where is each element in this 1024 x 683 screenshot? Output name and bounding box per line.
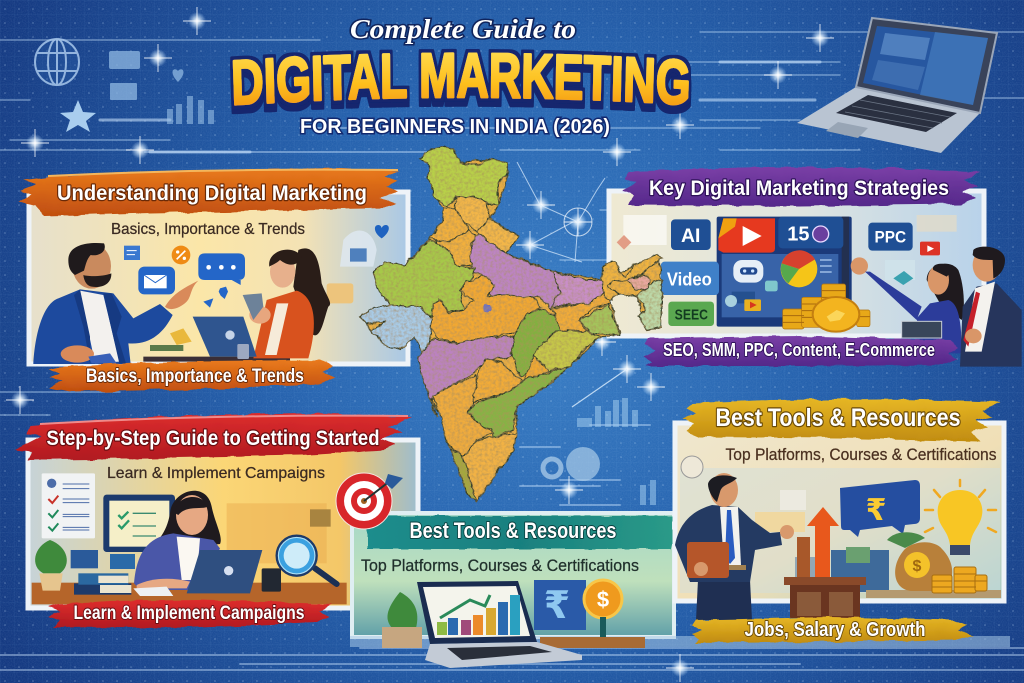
subheading: Learn & Implement Campaigns <box>107 465 325 482</box>
top banner: Understanding Digital Marketing <box>57 182 367 205</box>
icon: target with arrow <box>336 473 403 529</box>
books <box>74 573 131 595</box>
plant in crate <box>382 592 422 648</box>
coins <box>932 567 987 593</box>
bottom banner: SEO, SMM, PPC, Content, E-Commerce <box>663 340 935 360</box>
panel frame <box>675 423 1004 601</box>
panel: best tools and resources (teal) <box>350 513 1010 668</box>
plant <box>35 540 67 591</box>
monitor <box>71 495 175 569</box>
badge: PPC <box>868 223 913 251</box>
tablet <box>717 217 852 327</box>
woman <box>134 491 221 590</box>
badge: SEEC: SEEC <box>675 306 708 323</box>
top banner: Step-by-Step Guide to Getting Started <box>46 427 380 450</box>
bottom banner: Learn & Implement Campaigns <box>74 603 304 624</box>
icon: growth arrow <box>797 507 839 577</box>
illustration: woman at desk <box>32 473 347 604</box>
icon: money bag: $ <box>913 558 922 575</box>
icon: globe <box>35 39 79 85</box>
icon: rupee card <box>534 580 586 630</box>
icon: rupee speech bubble <box>840 480 920 537</box>
icon: heart <box>375 225 389 238</box>
bottom banner <box>48 600 332 628</box>
heading band <box>367 516 672 549</box>
icon: light bulb <box>925 480 996 555</box>
wooden desk <box>540 637 645 648</box>
sparkles <box>6 7 834 682</box>
bottom banner: Jobs, Salary & Growth <box>744 619 926 641</box>
panel frame <box>28 440 418 608</box>
icon: play tile <box>920 242 940 255</box>
badge: PPC: PPC <box>874 228 906 247</box>
heading band: Best Tools & Resources <box>410 518 616 543</box>
icon: robot <box>725 260 778 311</box>
top banner <box>15 413 412 460</box>
badge: SEEC <box>668 302 714 326</box>
subheading: Top Platforms, Courses & Certifications <box>726 445 996 464</box>
laptop with bar chart <box>417 581 582 668</box>
coins <box>783 284 870 332</box>
title: complete guide to: Complete Guide to <box>350 14 576 44</box>
badge: 15: 15 <box>787 224 809 246</box>
map of india <box>360 145 662 502</box>
icon: dollar coin <box>584 580 622 637</box>
panel: step-by-step guide <box>15 413 418 628</box>
panel background <box>352 513 674 637</box>
laptop <box>187 550 262 593</box>
icon: gears <box>543 447 600 481</box>
icon: rupee speech bubble: ₹ <box>866 493 886 528</box>
badge: Video: Video <box>667 268 712 289</box>
icon: rupee card: ₹ <box>544 583 570 627</box>
icon: chat bubble <box>198 253 245 285</box>
checklist <box>42 473 95 538</box>
businessman <box>675 473 794 620</box>
top banner: Best Tools & Resources <box>716 404 960 432</box>
top banner <box>682 399 1000 441</box>
bottom banner <box>48 360 335 392</box>
bar chart: background top left <box>167 96 214 124</box>
top banner: Key Digital Marketing Strategies <box>649 177 949 200</box>
subheading: Basics, Importance & Trends <box>111 221 305 238</box>
presenters <box>851 247 1022 367</box>
top banner <box>18 168 400 216</box>
cup <box>262 568 281 592</box>
chart: pie <box>781 250 832 287</box>
podium <box>784 577 866 618</box>
illustration: dashboard and presenters <box>617 215 1022 367</box>
icon: dollar coin: $ <box>597 587 609 612</box>
icon: video play <box>718 218 775 253</box>
bar chart: background right <box>577 398 656 505</box>
icon: money bag <box>887 532 952 591</box>
icon: magnifier <box>277 536 337 584</box>
icon: mail <box>138 267 175 294</box>
top banner <box>623 167 980 206</box>
icon: percent badge <box>172 246 190 264</box>
panel: jobs salary and growth <box>675 399 1004 643</box>
badge: AI: AI <box>681 226 700 247</box>
laptop: top right <box>797 18 997 153</box>
bottom banner <box>643 336 958 366</box>
panel frame <box>29 192 408 364</box>
subheading: Top Platforms, Courses & Certifications <box>361 556 639 575</box>
title: digital marketing: DIGITAL MARKETING <box>230 48 692 114</box>
badge: AI <box>671 219 711 250</box>
icon: social glyphs <box>109 51 183 100</box>
panel: key digital marketing strategies <box>609 167 1022 367</box>
panel frame <box>609 191 984 336</box>
title: for beginners in india: FOR BEGINNERS IN INDIA (2026) <box>300 116 610 138</box>
bottom banner: Basics, Importance & Trends <box>86 366 304 387</box>
icon: star <box>60 100 96 132</box>
city backdrop <box>681 456 1001 598</box>
panel: understanding digital marketing <box>0 160 408 392</box>
bottom banner <box>692 617 973 643</box>
illustration: man and woman <box>0 160 389 364</box>
badge: Video <box>661 262 719 295</box>
